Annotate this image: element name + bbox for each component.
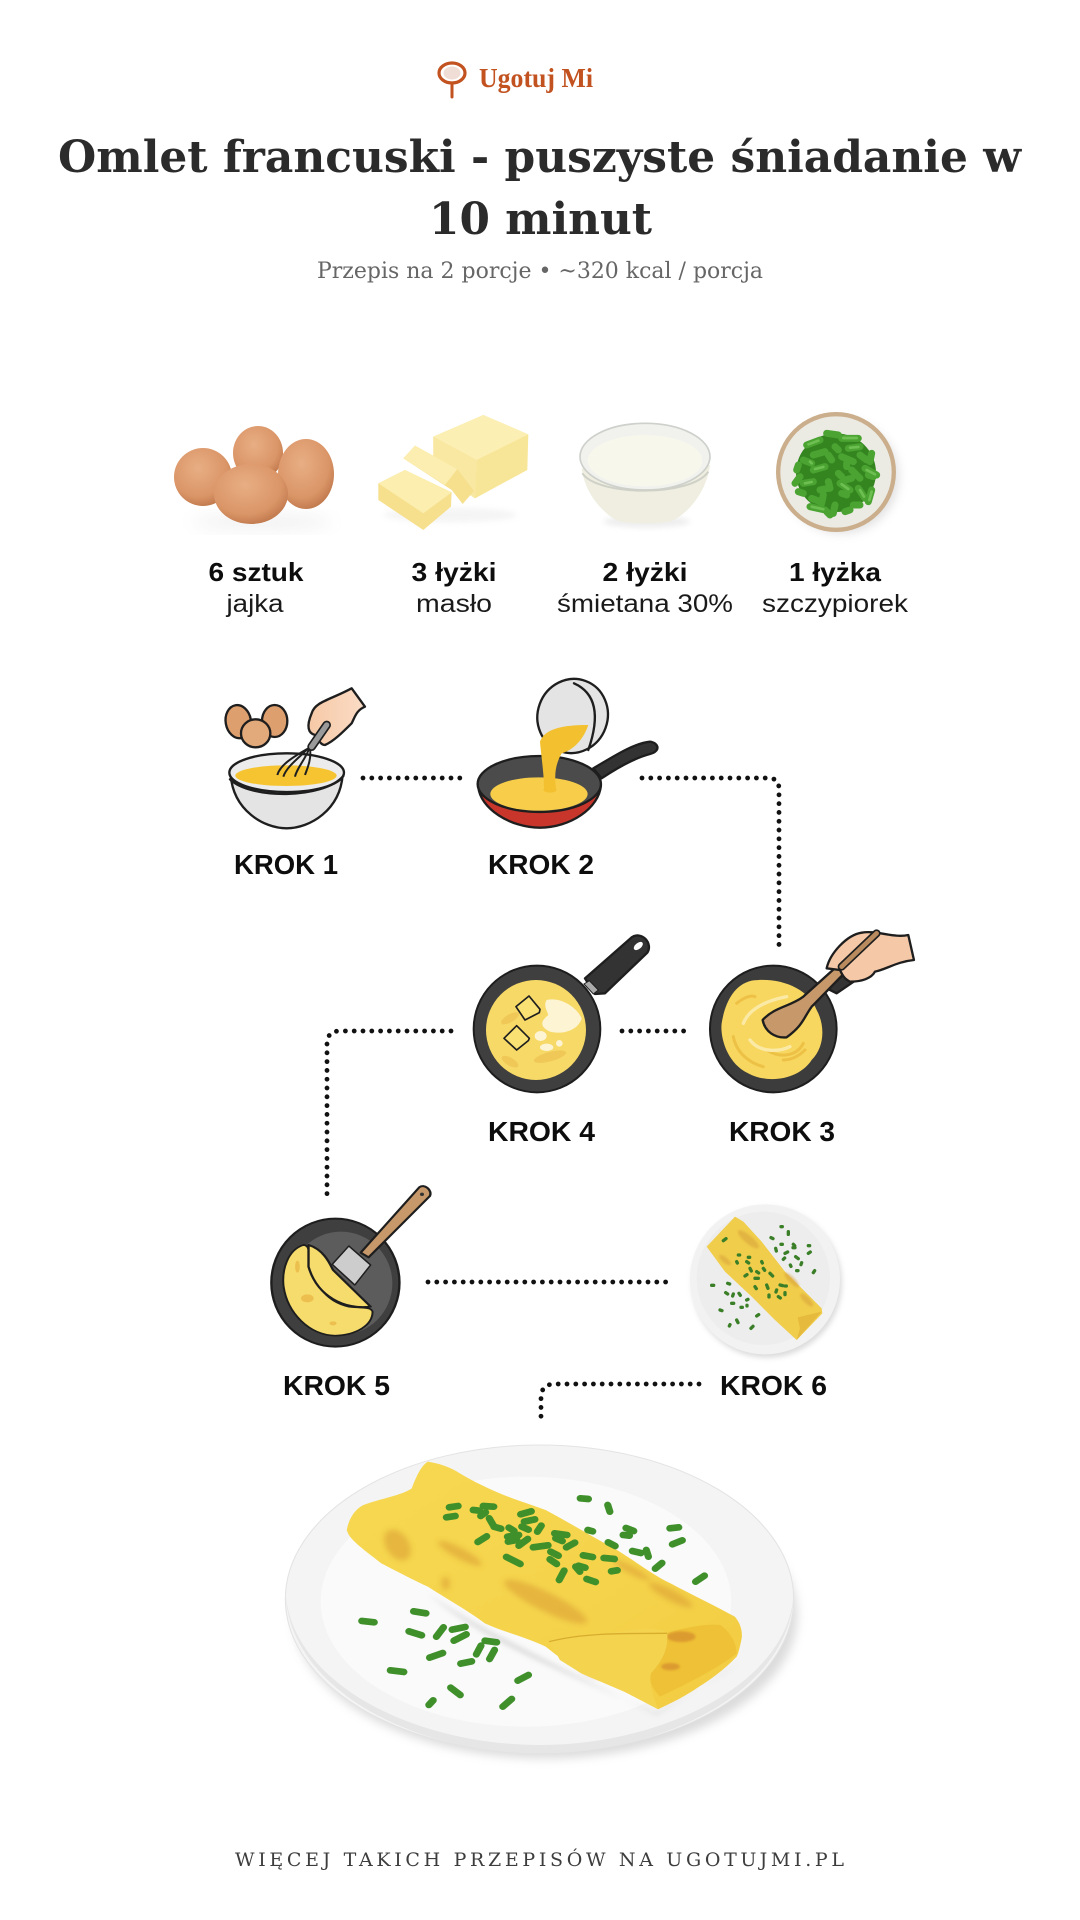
step 1 illustration: whisking eggs [223, 688, 365, 828]
title: Omlet francuski - puszyste śniadanie w [58, 132, 1022, 183]
logo [439, 63, 593, 97]
label: szczypiorek: szczypiorek [762, 590, 909, 618]
label: jajka: jajka [225, 590, 284, 618]
step 5 illustration: folding with spatula [271, 1186, 430, 1347]
label: jajka [208, 557, 304, 618]
label: smietana: 2 łyżki [602, 557, 688, 587]
label: szczypiorek [762, 557, 909, 618]
icon: eggs [174, 426, 334, 530]
brand name: Ugotuj Mi [479, 63, 593, 93]
dotted arrow: step 1 to step 2 [363, 776, 460, 780]
step 6 illustration: plated omelette [690, 1204, 842, 1358]
dotted connector: step 6 to finished dish [541, 1384, 699, 1425]
label: krok 5: KROK 5 [283, 1370, 390, 1401]
dotted connector: step 5 to step 6 [428, 1280, 667, 1284]
title [58, 132, 1022, 245]
label: maslo: masło [416, 590, 492, 618]
omelette [347, 1462, 742, 1709]
label: krok 2: KROK 2 [488, 849, 594, 880]
label: smietana [557, 557, 733, 618]
icon: chives bowl [776, 412, 899, 533]
panel: ingredients [174, 412, 909, 618]
label: maslo [412, 557, 496, 618]
dotted connector: step 3 to step 4 [622, 1029, 692, 1033]
step 3 illustration: stirring [710, 931, 914, 1092]
dotted connector: step 4 to step 5 [327, 1031, 451, 1200]
title: 10 minut [429, 194, 653, 245]
icon: butter [378, 415, 528, 530]
chives [362, 1498, 704, 1707]
dotted arrow: step 2 to step 3 [642, 778, 779, 945]
label: krok 4: KROK 4 [488, 1116, 595, 1147]
label: smietana: śmietana 30% [557, 590, 733, 618]
footer: WIĘCEJ TAKICH PRZEPISÓW NA UGOTUJMI.PL [235, 1848, 844, 1871]
label: krok 3: KROK 3 [729, 1116, 835, 1147]
finished dish: omelette on plate [285, 1445, 797, 1758]
label: jajka: 6 sztuk [208, 557, 304, 587]
step 2 illustration: pouring into pan [478, 669, 657, 828]
icon: cream bowl [580, 423, 710, 528]
label: maslo: 3 łyżki [412, 557, 496, 587]
plate [285, 1445, 797, 1758]
label: szczypiorek: 1 łyżka [789, 557, 882, 587]
label: krok 6: KROK 6 [720, 1370, 827, 1401]
subtitle: Przepis na 2 porcje • ~320 kcal / porcja [317, 259, 763, 284]
label: krok 1: KROK 1 [234, 849, 338, 880]
icon: spoon [439, 63, 465, 97]
step 4 illustration: butter in pan [474, 935, 649, 1092]
